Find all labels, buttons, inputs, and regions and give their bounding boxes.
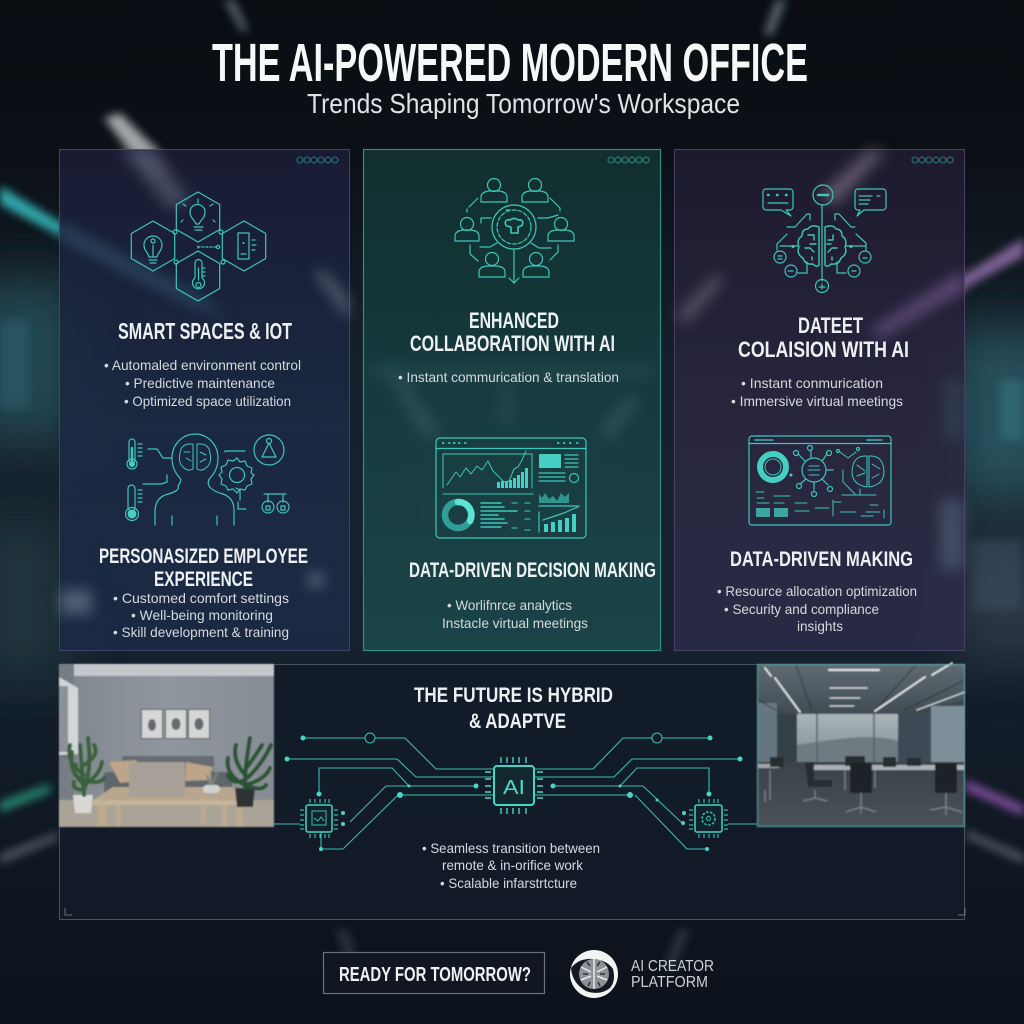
- bullets: dateet colaision: • Instant conmurication: [741, 375, 883, 391]
- logo: AI Creator Platform: AI CREATOR: [631, 958, 714, 975]
- bullets: data-driven making: • Resource allocation optimization: [717, 583, 917, 599]
- bullets: decision making: Instacle virtual meetings: [442, 615, 588, 631]
- heading: personalized employee experience: PERSONASIZED EMPLOYEE: [99, 545, 308, 568]
- bullets: smart spaces: • Automaled environment control: [104, 357, 301, 373]
- call to action button: READY FOR TOMORROW?: [339, 964, 531, 986]
- panel: enhanced collaboration and data-driven decisions: [364, 150, 660, 650]
- chip: right: [689, 799, 728, 838]
- logo: AI Creator Platform: [570, 950, 714, 998]
- heading: future hybrid: THE FUTURE IS HYBRID: [414, 684, 613, 707]
- heading: dateet colaision: [738, 313, 909, 362]
- chip: AI: [485, 757, 543, 814]
- bullets: data-driven making: [717, 583, 917, 634]
- bullets: future hybrid: • Seamless transition between: [422, 840, 600, 856]
- decorative dots: [608, 157, 649, 163]
- heading: personalized employee experience: EXPERIENCE: [154, 568, 253, 591]
- bullets: future hybrid: • Scalable infarstrtcture: [440, 875, 577, 891]
- heading: data-driven decision making: DATA-DRIVEN DECISION MAKING: [409, 559, 656, 582]
- bullets: personalized experience: • Skill development & training: [113, 624, 289, 640]
- bullets: personalized experience: • Customed comfort settings: [113, 590, 289, 606]
- bullets: data-driven making: insights: [797, 618, 843, 634]
- photo: home office: [59, 664, 274, 827]
- heading: data-driven making: DATA-DRIVEN MAKING: [730, 548, 913, 571]
- icon: brain network with chat bubbles: [763, 185, 886, 292]
- subtitle: Trends Shaping Tomorrow's Workspace: [307, 88, 740, 119]
- decorative dots: [912, 157, 953, 163]
- panel: dateet colaision and data-driven making: [674, 150, 964, 650]
- corner marks: [65, 908, 965, 915]
- chip: left: [300, 799, 338, 838]
- bullets: future hybrid: [422, 840, 600, 891]
- bullet: collaboration: • Instant commurication & translation: [398, 369, 619, 385]
- circuit diagram: [274, 733, 757, 851]
- heading: dateet colaision: COLAISION WITH AI: [738, 337, 909, 362]
- call to action button: [324, 952, 544, 994]
- heading: enhanced collaboration: COLLABORATION WITH AI: [410, 331, 615, 356]
- heading: enhanced collaboration: [410, 308, 615, 356]
- icon: collaboration network: [455, 178, 574, 283]
- heading: future hybrid: & ADAPTVE: [469, 710, 566, 733]
- bullets: dateet colaision: [731, 375, 903, 409]
- photo: conference room: [757, 663, 965, 827]
- panel: smart spaces and personalized experience: [60, 149, 350, 650]
- icon: smart hexagons: [131, 192, 266, 301]
- heading: enhanced collaboration: ENHANCED: [469, 308, 559, 333]
- heading: dateet colaision: DATEET: [798, 313, 863, 338]
- panel: the future is hybrid and adaptive: [59, 663, 965, 920]
- bullets: data-driven making: • Security and compliance: [724, 601, 879, 617]
- icon: data dashboard with brain: [749, 436, 891, 525]
- icon: person with brain: [126, 434, 289, 525]
- bullets: smart spaces: [104, 357, 301, 409]
- decorative dots: [297, 157, 338, 163]
- heading: smart spaces: SMART SPACES & IOT: [118, 318, 292, 344]
- chip: AI: AI: [503, 777, 525, 799]
- bullets: future hybrid: remote & in-orifice work: [442, 857, 584, 873]
- heading: personalized employee experience: [99, 545, 308, 591]
- bullets: personalized experience: • Well-being monitoring: [131, 607, 273, 623]
- bullets: decision making: • Worlifnrce analytics: [447, 597, 572, 613]
- bullets: smart spaces: • Predictive maintenance: [125, 375, 275, 391]
- icon: analytics dashboard: [436, 438, 586, 538]
- logo: AI Creator Platform: PLATFORM: [631, 974, 708, 991]
- bullets: personalized experience: [113, 590, 289, 640]
- heading: future hybrid: [414, 684, 613, 733]
- bullets: dateet colaision: • Immersive virtual meetings: [731, 393, 903, 409]
- bullets: smart spaces: • Optimized space utilization: [124, 393, 291, 409]
- bullets: decision making: [442, 597, 588, 631]
